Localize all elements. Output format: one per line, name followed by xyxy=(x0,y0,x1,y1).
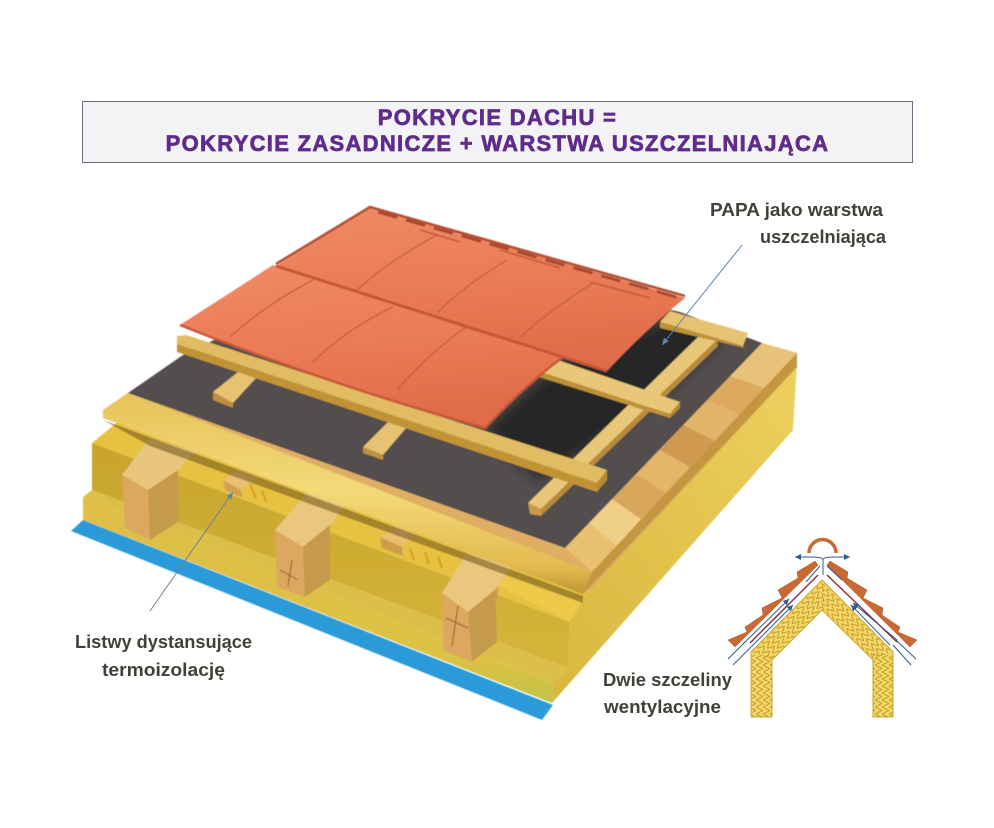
blue membrane xyxy=(71,520,553,720)
rafter 2 xyxy=(275,493,345,597)
roof illustration and labels xyxy=(70,202,917,721)
label: two slots: Dwie szczeliny xyxy=(603,669,733,690)
rafter 1 xyxy=(122,438,195,540)
title: POKRYCIE ZASADNICZE + WARSTWA USZCZELNIAJĄCA xyxy=(166,131,829,156)
right side of insulation xyxy=(552,362,797,703)
roof cross-section model xyxy=(71,207,797,720)
label: spacer battens: Listwy dystansujące xyxy=(75,631,252,652)
counter batten xyxy=(528,335,718,516)
roof tiles left xyxy=(728,561,818,647)
lower insulation layer xyxy=(83,490,568,703)
upper roof tile sheet xyxy=(276,207,685,371)
arrow: to felt xyxy=(662,245,742,345)
arrow: to spacer battens xyxy=(150,492,233,611)
title: POKRYCIE DACHU = xyxy=(378,105,617,130)
lower roof tile sheet xyxy=(180,265,562,428)
label: sealing layer: uszczelniająca xyxy=(760,226,887,247)
battens xyxy=(177,311,748,492)
airflow arrows xyxy=(728,557,916,665)
label: ventilation: wentylacyjne xyxy=(603,696,721,717)
ridge cap xyxy=(809,540,836,553)
membrane lines xyxy=(750,575,897,643)
wooden sheathing xyxy=(103,343,797,594)
rafter 3 xyxy=(442,553,512,662)
title xyxy=(82,101,913,163)
felt shadow xyxy=(485,315,722,480)
insulation profile xyxy=(751,580,893,717)
label: felt: PAPA jako warstwa xyxy=(710,199,884,220)
spacer battens xyxy=(223,470,510,600)
plank shadow xyxy=(103,420,583,603)
roofing felt xyxy=(128,250,762,548)
label: thermal insulation: termoizolację xyxy=(102,659,225,680)
upper insulation layer xyxy=(92,420,590,668)
lower cross battens xyxy=(213,372,407,460)
ridge ventilation diagram xyxy=(728,540,917,717)
roof tiles right xyxy=(827,561,917,647)
